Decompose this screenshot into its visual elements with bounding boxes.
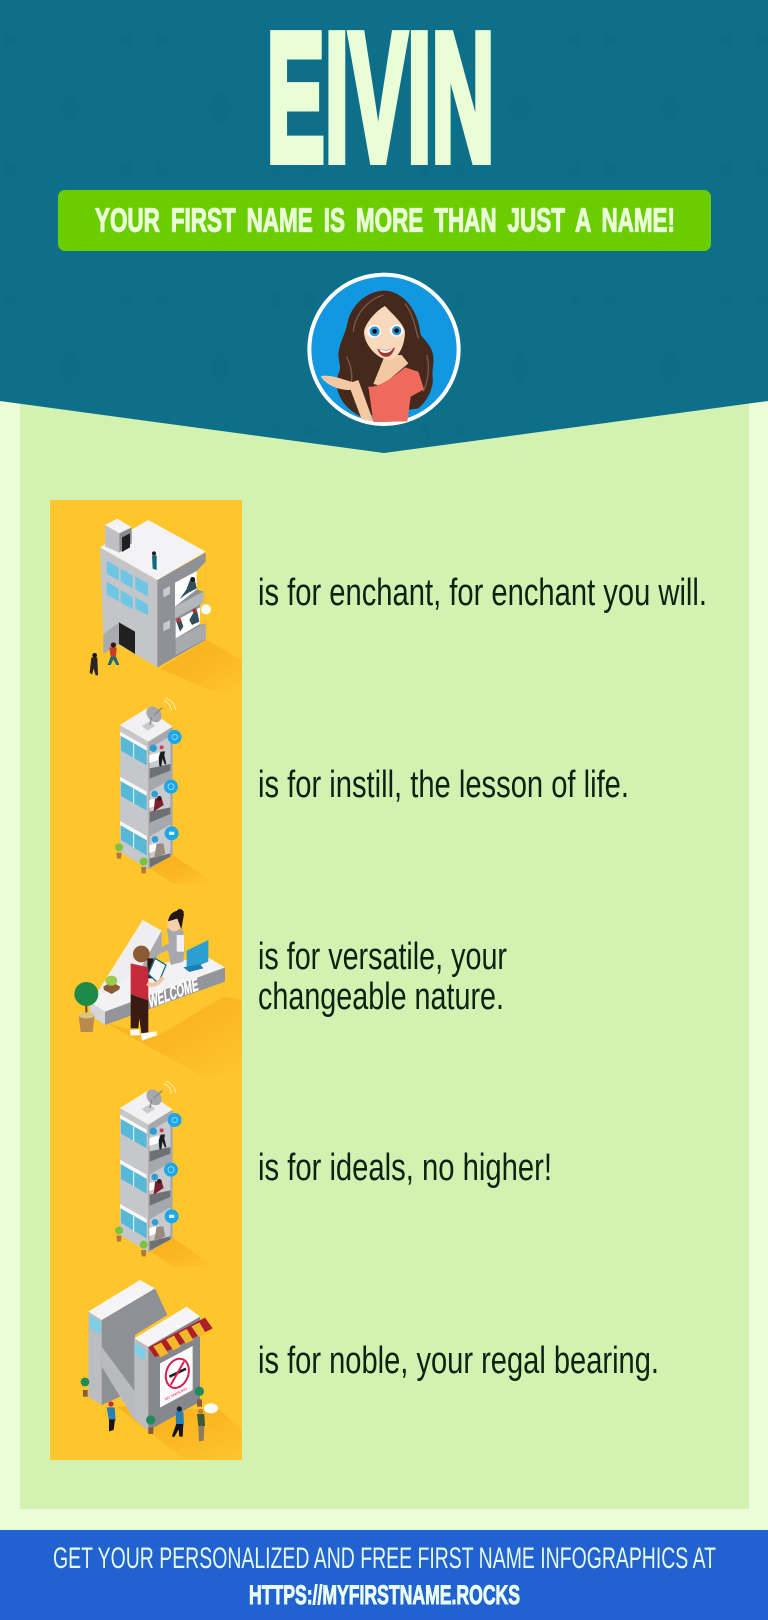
row V text: is for versatile, your bbox=[258, 936, 507, 978]
face bbox=[364, 306, 405, 360]
hair bbox=[337, 291, 433, 417]
shirt bbox=[368, 367, 424, 422]
no smoking sign bbox=[160, 1346, 193, 1408]
plants and people bbox=[81, 1378, 89, 1386]
footer url: HTTPS://MYFIRSTNAME.ROCKS bbox=[249, 1580, 520, 1610]
illustration: letter N building bbox=[81, 1280, 242, 1460]
illustration: tall tower 1 bbox=[115, 698, 215, 884]
illustration: office building bbox=[90, 519, 242, 692]
welcome lettering: WELCOME bbox=[148, 973, 199, 1012]
panel: content background bbox=[20, 390, 749, 1509]
people on balconies and roof bbox=[176, 578, 199, 632]
neck and arm bbox=[321, 355, 408, 421]
avatar: woman in circle bbox=[309, 275, 459, 424]
plants bbox=[103, 982, 120, 994]
illustration: welcome desk bbox=[74, 909, 242, 1075]
footer bbox=[0, 1530, 768, 1620]
header band bbox=[0, 0, 768, 453]
row I text 2: is for ideals, no higher! bbox=[258, 1147, 552, 1189]
banner bbox=[58, 190, 711, 251]
row V text bbox=[258, 936, 507, 1018]
pedestrians bbox=[109, 647, 117, 657]
customer bbox=[133, 946, 150, 962]
balconies bbox=[197, 562, 206, 625]
panel: yellow illustration strip bbox=[50, 500, 242, 1460]
infographic canvas: EIVIN bbox=[266, 0, 494, 200]
row V text: changeable nature. bbox=[258, 976, 504, 1018]
row N text: is for noble, your regal bearing. bbox=[258, 1340, 659, 1382]
text rows bbox=[258, 572, 707, 1382]
no smoking sign: NO SMOKING bbox=[164, 1387, 188, 1402]
receptionist bbox=[152, 928, 184, 965]
monitor bbox=[187, 940, 208, 971]
row I text: is for instill, the lesson of life. bbox=[258, 764, 629, 806]
illustration: tall tower 2 bbox=[115, 1081, 215, 1267]
awning bbox=[148, 1318, 213, 1357]
